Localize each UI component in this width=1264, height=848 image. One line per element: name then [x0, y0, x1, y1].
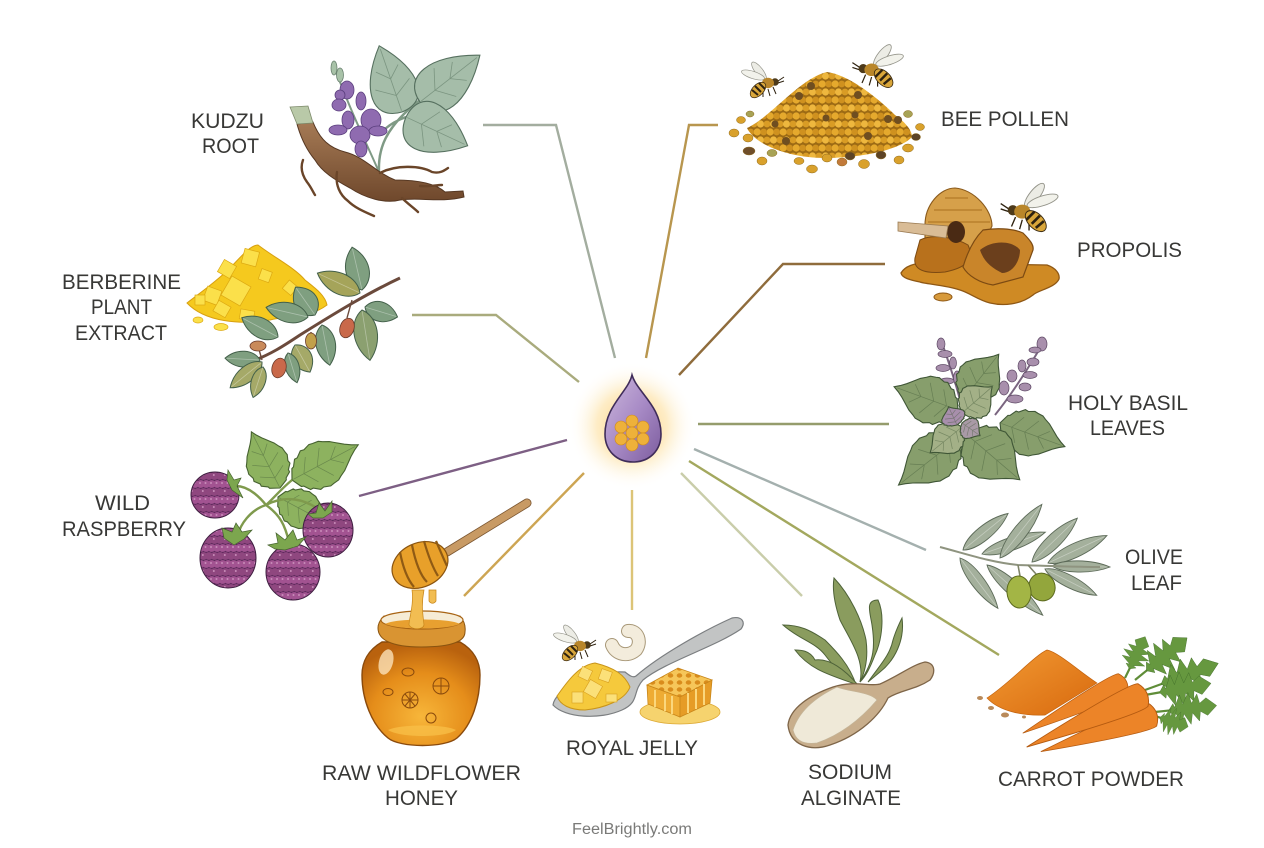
label: berberine plant extract: [62, 271, 181, 345]
illustration: hive, propolis chunks and bee: [898, 181, 1059, 304]
label: berberine plant extract: PLANT: [91, 296, 152, 319]
label: propolis: PROPOLIS: [1077, 239, 1182, 262]
label: berberine plant extract: EXTRACT: [75, 322, 167, 345]
ingredient: propolis: [898, 181, 1182, 304]
label: holy basil leaves: HOLY BASIL: [1068, 392, 1188, 415]
label: olive leaf: OLIVE: [1125, 546, 1183, 569]
illustration: seaweed and scoop: [783, 578, 934, 748]
illustration: carrots and orange powder: [977, 625, 1224, 764]
central honey drop icon: [568, 362, 696, 490]
label: raw wildflower honey: RAW WILDFLOWER: [322, 762, 521, 785]
illustration: holy basil sprig: [884, 337, 1073, 504]
label: olive leaf: LEAF: [1131, 572, 1182, 595]
label: sodium alginate: [801, 761, 901, 810]
label: carrot powder: CARROT POWDER: [998, 768, 1184, 791]
illustration: honey jar and dipper: [362, 503, 527, 746]
ingredient: carrot powder: [977, 625, 1224, 791]
label: sodium alginate: SODIUM: [808, 761, 892, 784]
ingredient: bee pollen: [729, 42, 1069, 173]
footer credit: FeelBrightly.com: [572, 821, 692, 838]
illustration: pollen pile and bees: [729, 42, 924, 173]
ingredient: olive leaf: [940, 500, 1183, 620]
label: kudzu root: [191, 110, 264, 158]
illustration: olive branch: [940, 500, 1110, 620]
label: holy basil leaves: [1068, 392, 1188, 440]
illustration: kudzu plant and root: [290, 37, 494, 216]
ingredient: berberine plant extract: [62, 245, 400, 400]
illustration: raspberries with leaves: [191, 422, 369, 600]
label: berberine plant extract: BERBERINE: [62, 271, 181, 294]
label: raw wildflower honey: [322, 762, 521, 810]
label: bee pollen: BEE POLLEN: [941, 108, 1069, 131]
ingredient: wild raspberry: [62, 422, 369, 600]
label: sodium alginate: ALGINATE: [801, 787, 901, 810]
illustration: spoon, bee, larva and honeycomb: [552, 618, 743, 724]
ingredient: royal jelly: [552, 618, 743, 760]
label: holy basil leaves: LEAVES: [1090, 417, 1165, 440]
label: royal jelly: ROYAL JELLY: [566, 737, 698, 760]
ingredient: sodium alginate: [783, 578, 934, 810]
label: wild raspberry: WILD: [95, 492, 150, 515]
label: olive leaf: [1125, 546, 1183, 595]
label: wild raspberry: [62, 492, 186, 541]
illustration: yellow powder and branch: [187, 245, 400, 400]
label: wild raspberry: RASPBERRY: [62, 518, 186, 541]
label: raw wildflower honey: HONEY: [385, 787, 458, 810]
label: kudzu root: ROOT: [202, 135, 259, 158]
ingredient: kudzu root: [191, 37, 494, 216]
radial connector lines: [359, 125, 999, 655]
label: kudzu root: KUDZU: [191, 110, 264, 133]
ingredient: holy basil leaves: [884, 337, 1188, 504]
ingredient: raw wildflower honey: [322, 503, 527, 810]
